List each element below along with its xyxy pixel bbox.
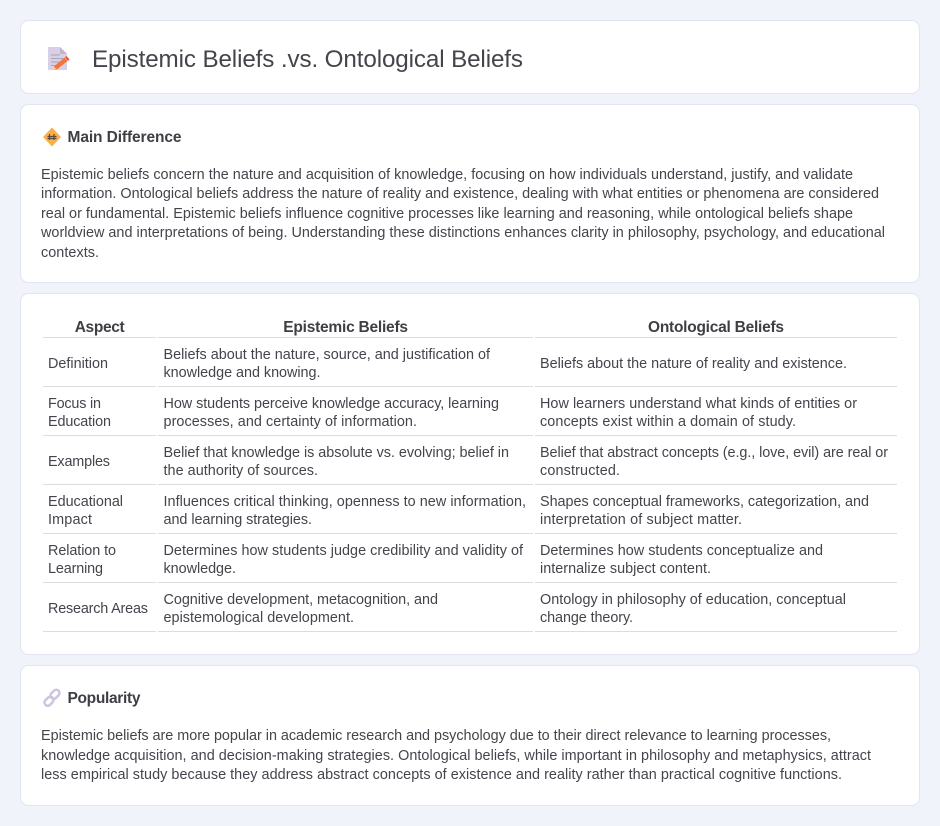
text block: main difference paragraph: information. Ontological beliefs address the nature of reality and existence, dealing with what entities or phenomena are considered xyxy=(41,186,879,202)
table row: definition: Beliefs about the nature, source, and justification of xyxy=(164,347,491,363)
table row: educational impact: Influences critical thinking, openness to new information, xyxy=(164,494,526,510)
table row: educational impact: Impact xyxy=(48,512,92,528)
table row: relation to learning: Learning xyxy=(48,561,103,577)
table row: definition: Beliefs about the nature of reality and existence. xyxy=(540,356,847,372)
text block: main difference paragraph xyxy=(40,167,885,261)
table row: definition: Definition xyxy=(48,356,108,372)
table row: educational impact: and learning strategies. xyxy=(164,512,312,528)
title: Epistemic Beliefs .vs. Ontological Beliefs xyxy=(92,46,523,73)
text block: main difference paragraph: contexts. xyxy=(41,245,99,261)
table header row xyxy=(43,319,897,338)
table row: educational impact xyxy=(43,494,897,534)
icon: document with pencil xyxy=(48,47,70,70)
table row: relation to learning: internalize subject content. xyxy=(540,561,711,577)
table row: focus in education: How students perceive knowledge accuracy, learning xyxy=(164,396,499,412)
heading: main difference: Main Difference xyxy=(68,129,182,146)
table row: focus in education: processes, and certainty of information. xyxy=(164,414,417,430)
table row: focus in education: Focus in xyxy=(48,396,101,412)
text block: popularity paragraph: Epistemic beliefs are more popular in academic research and psychology due to their direct relevance to learning processes, xyxy=(41,728,831,744)
table row: examples xyxy=(43,445,897,484)
table row: examples: the authority of sources. xyxy=(164,463,318,479)
panel: main difference xyxy=(20,104,920,282)
table row: relation to learning xyxy=(43,543,897,582)
table row: definition xyxy=(43,347,897,386)
text block: main difference paragraph: real or fundamental. Epistemic beliefs influence cognitive processes like learning and reasoning, while ontological beliefs shape xyxy=(41,206,853,222)
table row: research areas: Ontology in philosophy of education, conceptual xyxy=(540,592,846,608)
text block: popularity paragraph: less empirical study because they address abstract concepts of existence and reality rather than practical cognitive functions. xyxy=(41,767,842,783)
table header row: Aspect xyxy=(75,319,125,336)
table row: definition: knowledge and knowing. xyxy=(164,365,320,381)
text block: main difference paragraph: Epistemic beliefs concern the nature and acquisition of knowledge, focusing on how individuals understand, justify, and validate xyxy=(41,167,853,183)
table row: relation to learning: knowledge. xyxy=(164,561,236,577)
panel: comparison table xyxy=(20,294,920,654)
table header row: Epistemic Beliefs xyxy=(283,319,408,336)
table row: relation to learning: Relation to xyxy=(48,543,116,559)
table row: research areas: change theory. xyxy=(540,610,633,626)
table row: focus in education: How learners understand what kinds of entities or xyxy=(540,396,857,412)
table row: focus in education xyxy=(43,396,897,436)
table row: research areas: epistemological development. xyxy=(164,610,354,626)
panel: title header xyxy=(20,20,920,94)
table header row: Ontological Beliefs xyxy=(648,319,784,336)
table row: examples: Examples xyxy=(48,454,110,470)
table row: educational impact: Educational xyxy=(48,494,123,510)
icon: chain link xyxy=(43,688,61,707)
table row: educational impact: Shapes conceptual frameworks, categorization, and xyxy=(540,494,869,510)
table row: research areas: Cognitive development, metacognition, and xyxy=(164,592,438,608)
table row: research areas: Research Areas xyxy=(48,601,148,617)
heading: popularity: Popularity xyxy=(68,690,141,707)
table row: examples: Belief that abstract concepts (e.g., love, evil) are real or xyxy=(540,445,888,461)
panel: popularity xyxy=(20,666,920,806)
table row: research areas xyxy=(43,592,897,632)
table row: educational impact: interpretation of subject matter. xyxy=(540,512,742,528)
text block: popularity paragraph: knowledge acquisition, and decision-making strategies. Ontological beliefs, while important in philosophy and metaphysics, attract xyxy=(41,748,871,764)
table row: examples: constructed. xyxy=(540,463,620,479)
table row: focus in education: concepts exist within a domain of study. xyxy=(540,414,796,430)
table row: relation to learning: Determines how students conceptualize and xyxy=(540,543,823,559)
table row: focus in education: Education xyxy=(48,414,111,430)
icon: orange diamond sign xyxy=(44,128,60,146)
table row: examples: Belief that knowledge is absolute vs. evolving; belief in xyxy=(164,445,509,461)
text block: popularity paragraph xyxy=(41,728,871,783)
table row: relation to learning: Determines how students judge credibility and validity of xyxy=(164,543,524,559)
text block: main difference paragraph: worldview and interpretations of being. Understanding these distinctions enhances clarity in philosophy, psychology, and educational xyxy=(40,225,885,241)
